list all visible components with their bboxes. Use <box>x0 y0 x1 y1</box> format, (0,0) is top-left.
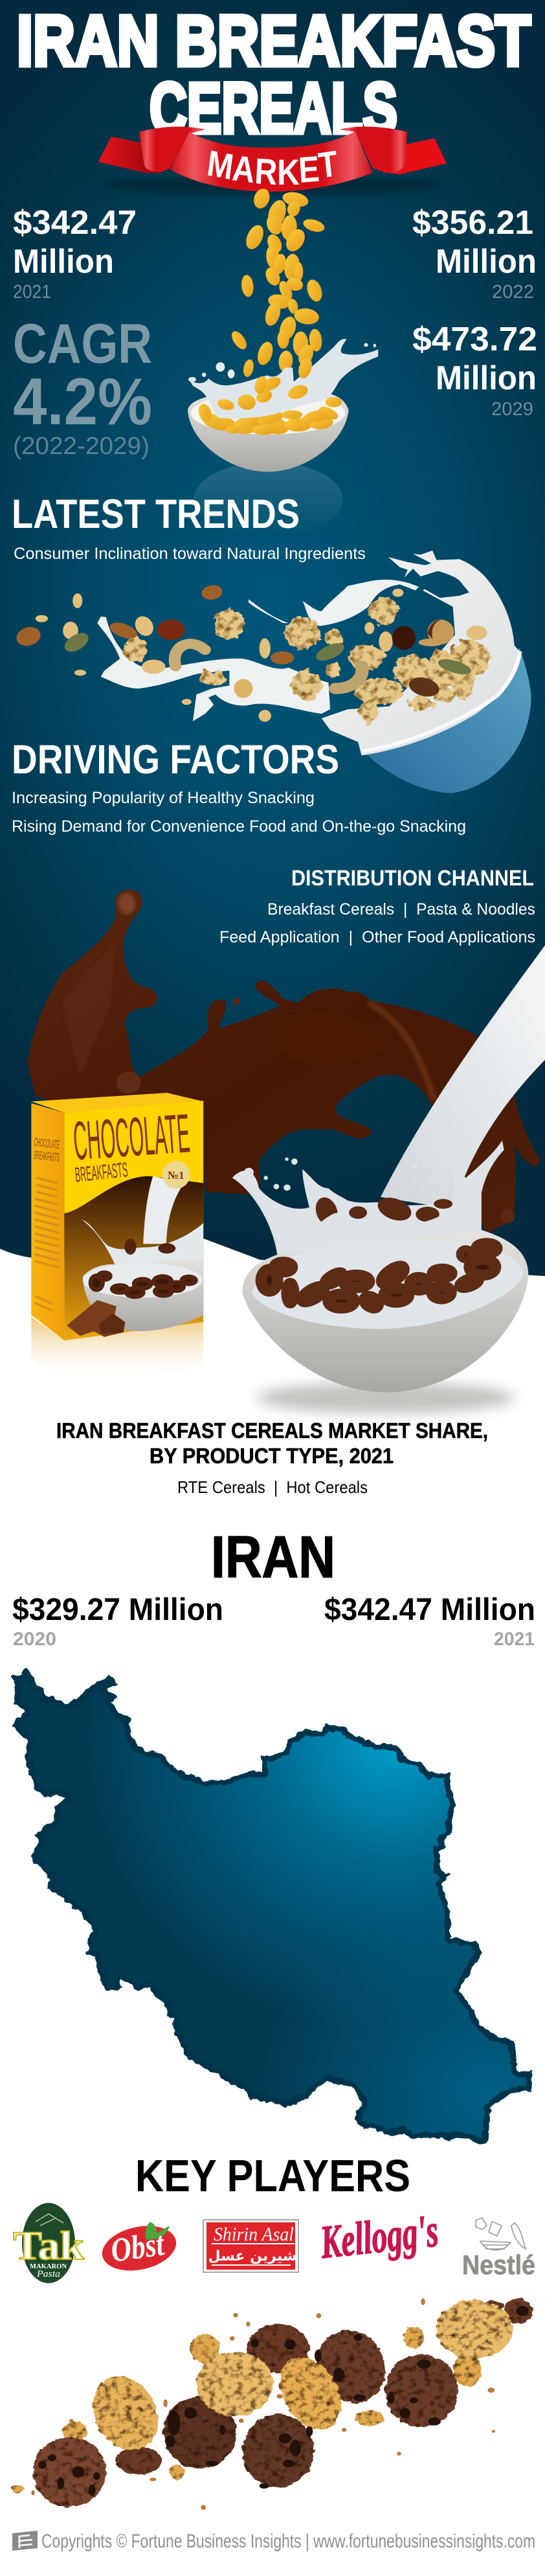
left stats 2021: 2021 <box>13 282 51 302</box>
text: product types: RTE Cereals | Hot Cereals <box>177 1477 368 1497</box>
right stats 2029: $473.72 <box>412 321 537 358</box>
text: latest trend item: Consumer Inclination toward Natural Ingredients <box>14 545 366 563</box>
stat: 2021 value: 2021 <box>494 1629 535 1650</box>
illustration: cereal bowl with falling flakes and milk splash <box>188 187 378 537</box>
right stats 2029: 2029 <box>491 399 533 420</box>
text: distribution items row 1: Breakfast Cereals | Pasta & Noodles <box>267 900 535 918</box>
map: Iran <box>10 1667 532 2144</box>
stat: 2020 value: 2020 <box>13 1629 56 1650</box>
CAGR block: 4.2% <box>13 365 152 439</box>
logo: Tak <box>13 2203 85 2283</box>
left stats 2021: $342.47 <box>13 204 137 242</box>
text: driving factor 2: Rising Demand for Convenience Food and On-the-go Snacking <box>12 817 466 836</box>
stat: 2021 value <box>324 1593 535 1650</box>
title: CEREALS <box>150 69 397 148</box>
dark blue background panel <box>0 0 545 1425</box>
stat: 2021 value: $342.47 Million <box>324 1593 535 1627</box>
illustration: falling cookies <box>12 2298 533 2510</box>
CAGR block: (2022-2029) <box>13 433 150 460</box>
ribbon label MARKET: MARKET <box>205 143 340 193</box>
stat: 2020 value: $329.27 Million <box>12 1593 223 1627</box>
heading: latest trends: LATEST TRENDS <box>12 492 300 537</box>
right stats 2022 <box>412 204 537 302</box>
footer logo <box>12 2531 38 2551</box>
logo: Nestle <box>462 2218 535 2280</box>
stat: 2020 value <box>12 1593 223 1650</box>
text: distribution items row 2: Feed Application | Other Food Applications <box>219 928 535 946</box>
illustration: granola bowl with milk splash <box>12 551 531 793</box>
logo: Obst <box>98 2220 181 2277</box>
illustration: cereal box <box>31 1093 203 1383</box>
infographic canvas: CHOCOLATE <box>71 1102 192 1172</box>
box badge: No 1 <box>162 1161 190 1189</box>
bowl shadow <box>256 1382 515 1413</box>
heading: key players: KEY PLAYERS <box>135 2150 410 2201</box>
illustration: chocolate splash <box>28 890 540 1233</box>
ribbon banner <box>98 127 447 195</box>
logo: Shirin Asal: Shirin Asal <box>214 2224 294 2245</box>
box side label <box>34 1135 60 1164</box>
right stats 2029 <box>412 321 537 420</box>
left stats 2021 <box>13 204 137 302</box>
right stats 2022: Million <box>436 243 537 280</box>
right stats 2022: 2022 <box>492 282 534 302</box>
logo: Shirin Asal <box>203 2220 298 2272</box>
logo: Kellogg's: Kellogg's <box>318 2204 441 2268</box>
logo: Tak: Pasta <box>36 2269 60 2279</box>
right stats 2029: Million <box>436 359 537 397</box>
heading: market share: BY PRODUCT TYPE, 2021 <box>150 1444 394 1468</box>
logo: Tak: Tak <box>13 2224 85 2268</box>
heading: market share <box>56 1419 488 1468</box>
illustration: milk stream and white bowl with chocolate rings <box>232 945 545 1393</box>
box badge: No 1: №1 <box>168 1169 184 1181</box>
title <box>17 1 531 148</box>
right stats 2022: $356.21 <box>412 204 533 242</box>
illustration: cereal box: BREAKFASTS <box>34 1148 60 1164</box>
logo: Nestle: Nestlé <box>462 2250 535 2280</box>
heading: market share: IRAN BREAKFAST CEREALS MARKET SHARE, <box>56 1419 488 1442</box>
left stats 2021: Million <box>13 243 114 280</box>
text: driving factor 1: Increasing Popularity of Healthy Snacking <box>12 789 315 807</box>
CAGR block: CAGR <box>13 313 152 375</box>
logo: Shirin Asal: شیرین عسل <box>208 2248 297 2264</box>
illustration: cereal box: BREAKFASTS <box>74 1158 129 1187</box>
illustration: cereal box: CHOCOLATE <box>34 1135 60 1151</box>
heading: Iran: IRAN <box>211 1525 335 1590</box>
logo: Obst: Obst <box>109 2226 167 2270</box>
white lower wave background <box>0 1238 545 2576</box>
heading: driving factors: DRIVING FACTORS <box>12 737 339 782</box>
logo: Tak: MAKARON <box>30 2263 67 2270</box>
CAGR block <box>13 313 152 460</box>
